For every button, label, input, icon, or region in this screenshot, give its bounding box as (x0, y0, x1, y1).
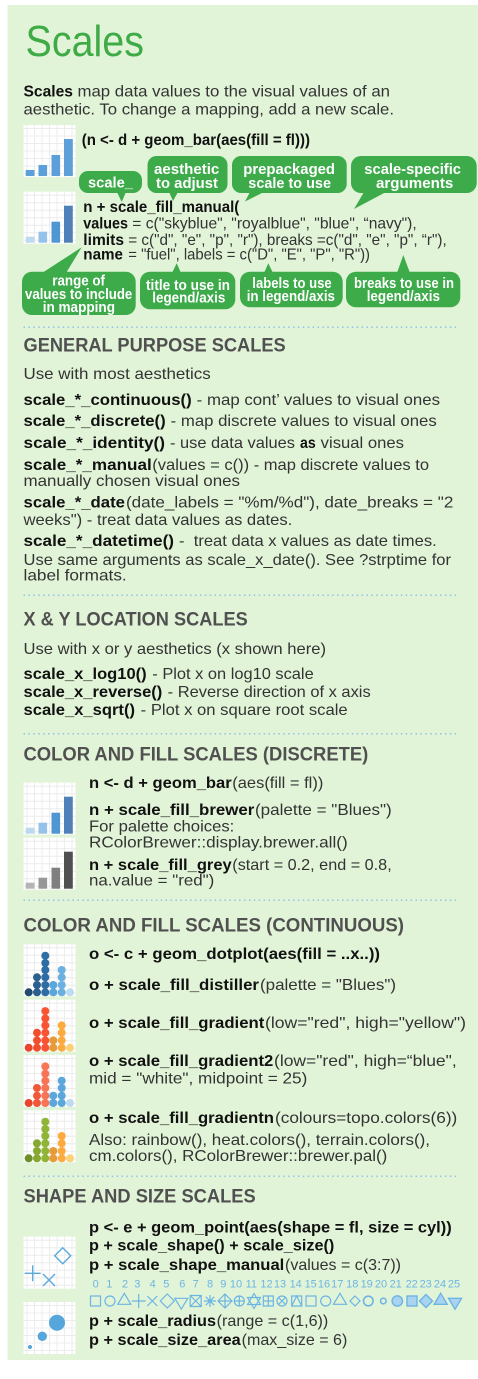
text block: general purpose functions: (date_labels = "%m/%d"), date_breaks = "2 (126, 495, 453, 512)
text block: shape scale code: p + scale_shape_manual (89, 1257, 284, 1274)
legend: shape numbers: 1 (106, 1279, 112, 1291)
callout: scale-specific arguments (351, 156, 477, 209)
callout: range of values (22, 247, 136, 316)
text block: location scale functions: - Plot x on square root scale (141, 702, 348, 719)
text block: location scale functions: scale_x_log10() (24, 666, 147, 683)
text block: continuous scale code: o + scale_fill_gradient (89, 1015, 265, 1032)
callout: scale_ (79, 171, 142, 202)
callout: labels to use (240, 263, 343, 307)
legend: shape numbers: 4 (150, 1279, 156, 1291)
text block: discrete scale code: (palette = "Blues") (255, 802, 392, 819)
text block: continuous scale code: (low="red", high="yellow") (265, 1015, 466, 1032)
text block: general purpose functions: - map discrete values to visual ones (171, 413, 437, 430)
chart: manual scale bar chart (24, 192, 76, 244)
text block: discrete scale code: n + scale_fill_brewer (89, 802, 254, 819)
legend: shape numbers: 23 (420, 1279, 432, 1291)
code: scale_fill_manual example: values (83, 215, 128, 232)
callout: range of values: values to include (25, 287, 132, 303)
chart: brewer blues bars (24, 783, 76, 835)
text block: general purpose functions: Use same arguments as scale_x_date(). See ?strptime for (24, 552, 452, 569)
text block: shape scale code: p + scale_shape() + scale_size() (89, 1238, 334, 1255)
text block: continuous scale code: o + scale_fill_gradient2 (89, 1053, 273, 1070)
heading: general purpose scales: GENERAL PURPOSE SCALES (24, 335, 286, 357)
text block: location scale functions: - Reverse direction of x axis (168, 684, 371, 701)
text block: general purpose functions: manually chosen visual ones (24, 473, 240, 490)
legend: shape numbers: 2 (122, 1279, 128, 1291)
callout: breaks to use: legend/axis (367, 289, 440, 305)
text block: continuous scale code: (palette = "Blues") (260, 977, 396, 994)
text block: general purpose functions: visual ones (321, 435, 404, 452)
callout: title to use: legend/axis (152, 291, 225, 307)
code: scale_fill_manual example: = c("d", "e", "p", "r"), breaks =c("d", "e", "p", “r"), (128, 232, 447, 249)
callout: scale-specific arguments: scale-specific (364, 162, 461, 178)
text block: discrete scale code (89, 775, 392, 890)
callout: range of values: range of (52, 274, 105, 290)
text block: shape scale code (89, 1220, 452, 1274)
callout: labels to use: in legend/axis (247, 289, 335, 305)
chart: gradient dotplot (24, 1000, 76, 1052)
text block: continuous scale code (89, 946, 466, 1165)
chart: distiller dotplot (24, 944, 76, 996)
intro text (24, 84, 394, 119)
heading: color and fill continuous: COLOR AND FILL SCALES (CONTINUOUS) (24, 914, 404, 936)
legend: shape numbers: 7 (193, 1279, 199, 1291)
legend: shape numbers: 19 (361, 1279, 373, 1291)
callout: prepackaged scale to use: prepackaged (243, 162, 335, 178)
code: scale_fill_manual example: limits (83, 232, 124, 249)
callout: prepackaged scale to use: scale to use (248, 176, 331, 192)
text block: general purpose functions: weeks") - treat data values as dates. (22, 512, 292, 529)
legend: shape numbers: 25 (448, 1279, 460, 1291)
intro text: map data values to the visual values of an (78, 84, 390, 101)
callout: scale_: scale_ (88, 176, 134, 192)
legend: shape numbers: 16 (318, 1279, 330, 1291)
text block: general purpose functions (22, 366, 453, 585)
code: scale_fill_manual example: = "fuel", labels = c("D", "E", "P", "R")) (128, 246, 370, 263)
text block: size scale code (89, 1313, 347, 1349)
legend: shape numbers: 0 (93, 1279, 99, 1291)
legend: shape numbers: 8 (207, 1279, 213, 1291)
intro text: Scales (24, 84, 73, 101)
text block: general purpose functions: scale_*_identity() (24, 435, 165, 452)
text block: discrete scale code: (start = 0.2, end = 0.8, (232, 857, 392, 874)
text block: general purpose functions: - use data values (170, 435, 295, 452)
heading: x and y location scales: X & Y LOCATION SCALES (24, 608, 248, 630)
callout: range of values: in mapping (43, 300, 115, 316)
callout: title to use (140, 263, 235, 309)
text block: continuous scale code: (low="red", high=“blue", (274, 1053, 457, 1070)
chart: grey bars (24, 838, 76, 890)
callout: aesthetic to adjust (148, 156, 228, 201)
heading: color and fill discrete: COLOR AND FILL SCALES (DISCRETE) (24, 743, 368, 765)
text block: discrete scale code: n + scale_fill_grey (89, 857, 232, 874)
code: scale_fill_manual example: n + scale_fill_manual( (83, 199, 240, 216)
chart: shape scatter (24, 1237, 76, 1289)
legend: shape numbers: 24 (434, 1279, 446, 1291)
legend: shape numbers: 14 (290, 1279, 302, 1291)
chart: default bar chart (24, 125, 76, 177)
intro text: aesthetic. To change a mapping, add a new scale. (24, 102, 394, 119)
text block: size scale code: p + scale_radius (89, 1313, 216, 1330)
callout: breaks to use (346, 255, 460, 307)
text block: location scale functions: scale_x_reverse() (24, 684, 162, 701)
text block: discrete scale code: (aes(fill = fl)) (232, 775, 323, 792)
callout: breaks to use: breaks to use in (354, 276, 454, 292)
text block: location scale functions: Use with x or y aesthetics (x shown here) (24, 641, 326, 658)
text block: discrete scale code: RColorBrewer::display.brewer.all() (89, 835, 348, 852)
text block: general purpose functions: as (300, 435, 316, 452)
text block: general purpose functions: scale_*_discrete() (24, 413, 166, 430)
text block: continuous scale code: cm.colors(), RColorBrewer::brewer.pal() (89, 1148, 387, 1165)
text block: continuous scale code: Also: rainbow(), heat.colors(), terrain.colors(), (89, 1132, 430, 1149)
legend: shape numbers: 5 (163, 1279, 169, 1291)
text block: general purpose functions: scale_*_datetime() (24, 533, 174, 550)
text block: general purpose functions: scale_*_manual (24, 457, 152, 474)
legend: shape numbers: 21 (390, 1279, 402, 1291)
text block: general purpose functions: scale_*_continuous() (24, 392, 192, 409)
text block: location scale functions: - Plot x on log10 scale (152, 666, 314, 683)
chart: gradientn dotplot (24, 1110, 76, 1162)
text block: size scale code: p + scale_size_area (89, 1332, 241, 1349)
legend: shape numbers: 20 (375, 1279, 387, 1291)
callout: labels to use: labels to use (252, 276, 332, 292)
text block: general purpose functions: - treat data x values as date times. (179, 533, 437, 550)
callout: title to use: title to use in (146, 278, 230, 294)
text block: continuous scale code: (colours=topo.colors(6)) (275, 1110, 457, 1127)
text block: general purpose functions: (values = c()) - map discrete values to (152, 457, 429, 474)
text block: general purpose functions: label formats. (24, 568, 127, 585)
legend: shape numbers: 9 (220, 1279, 226, 1291)
legend: shape numbers: 3 (134, 1279, 140, 1291)
legend: shape numbers: 18 (346, 1279, 358, 1291)
code: scale_fill_manual example: = c("skyblue", "royalblue", "blue", “navy"), (132, 215, 417, 232)
legend: shape numbers: 17 (331, 1279, 343, 1291)
text block: discrete scale code: For palette choices: (89, 819, 234, 836)
legend: shape numbers: 13 (274, 1279, 286, 1291)
text block: discrete scale code: n <- d + geom_bar (89, 775, 232, 792)
text block: continuous scale code: mid = "white", midpoint = 25) (89, 1070, 307, 1087)
legend: shape numbers: 6 (179, 1279, 185, 1291)
legend: shape numbers: 10 (230, 1279, 242, 1291)
text block: discrete scale code: na.value = "red") (89, 873, 214, 890)
text block: shape scale code: (values = c(3:7)) (285, 1257, 401, 1274)
text block: general purpose functions: scale_*_date (24, 495, 125, 512)
heading: shape and size scales: SHAPE AND SIZE SCALES (24, 1186, 256, 1208)
text block: continuous scale code: o <- c + geom_dotplot(aes(fill = ..x..)) (89, 946, 380, 963)
title: Scales (26, 17, 144, 66)
callout: aesthetic to adjust: to adjust (156, 176, 218, 192)
text block: continuous scale code: o + scale_fill_gradientn (89, 1110, 274, 1127)
legend: shape numbers: 11 (246, 1279, 257, 1291)
text block: size scale code: (max_size = 6) (242, 1332, 347, 1349)
legend: shape numbers: 12 (260, 1279, 273, 1291)
code: geom_bar mapping: (n <- d + geom_bar(aes(fill = fl))) (82, 132, 310, 149)
text block: general purpose functions: - map cont’ values to visual ones (197, 392, 440, 409)
callout: prepackaged scale to use (232, 156, 347, 202)
text block: continuous scale code: o + scale_fill_distiller (89, 977, 259, 994)
legend: shape glyphs (90, 1293, 462, 1309)
code: scale_fill_manual example (83, 199, 447, 263)
legend: shape numbers (93, 1279, 460, 1291)
chart: gradient2 dotplot (24, 1055, 76, 1107)
legend: shape numbers: 22 (406, 1279, 418, 1291)
chart: size scatter (24, 1302, 76, 1354)
callout: aesthetic to adjust: aesthetic (154, 162, 219, 178)
text block: general purpose functions: Use with most aesthetics (24, 366, 211, 383)
text block: shape scale code: p <- e + geom_point(aes(shape = fl, size = cyl)) (89, 1220, 452, 1237)
text block: location scale functions (24, 641, 371, 719)
text block: size scale code: (range = c(1,6)) (217, 1313, 328, 1330)
legend: shape numbers: 15 (305, 1279, 317, 1291)
code: scale_fill_manual example: name (83, 246, 123, 263)
text block: location scale functions: scale_x_sqrt() (24, 702, 135, 719)
callout: scale-specific arguments: arguments (376, 176, 453, 192)
